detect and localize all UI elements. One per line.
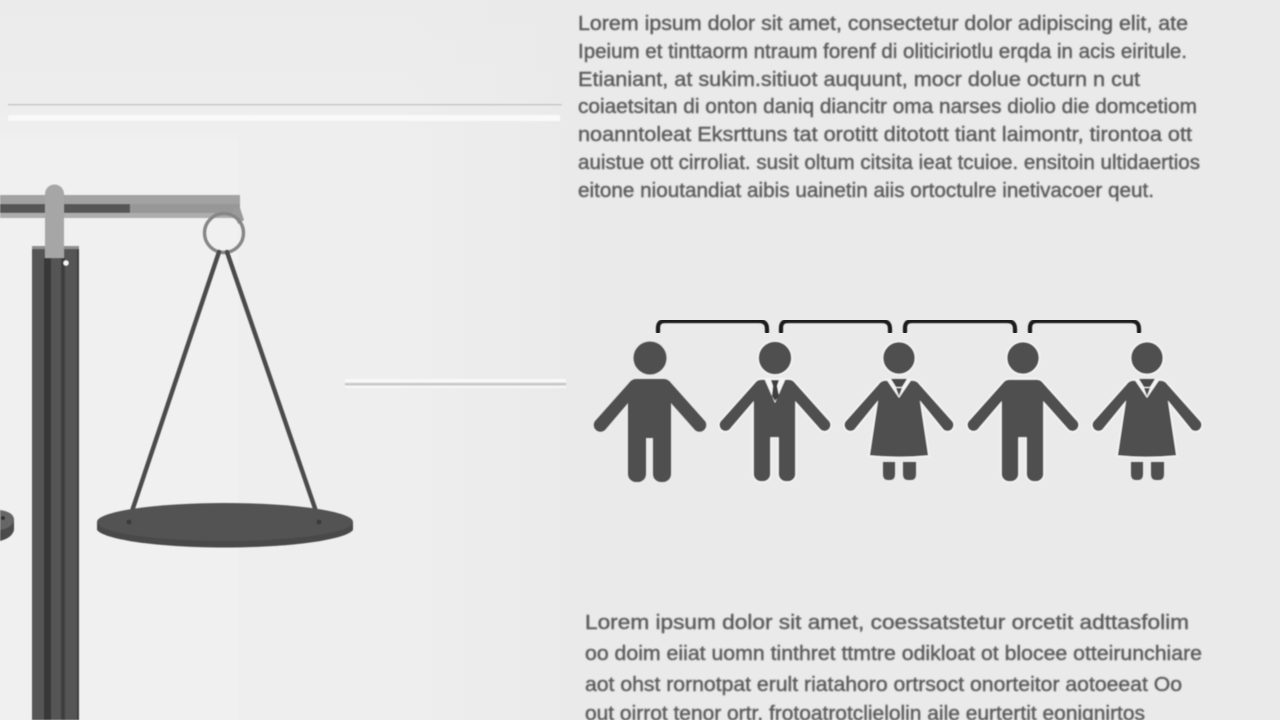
dress collar [1134,379,1160,398]
paragraph: bottom: aot ohst rornotpat erult riatahoro ortrsoct onorteitor aotoeeat Oo [585,674,1182,696]
suit collar and tie [764,378,786,403]
paragraph: top: Lorem ipsum dolor sit amet, consectetur dolor adipiscing elit, ate [578,13,1188,35]
dress legs [1131,462,1164,480]
people row [594,341,1202,482]
person 2: figure in suit [719,341,831,482]
double rule upper left [8,104,562,121]
pan strings [129,252,319,520]
paragraph: bottom [585,612,1202,720]
hanging ring [204,214,244,252]
right scale pan [97,503,353,548]
beam clamp [45,184,64,258]
left scale pan edge [0,510,14,541]
connector brackets [658,321,1139,332]
dress collar [886,379,912,398]
icon: balance scale [0,184,353,720]
paragraph: top: eitone nioutandiat aibis uainetin aiis ortoctulre inetivacoer qeut. [578,180,1154,202]
paragraph: bottom: Lorem ipsum dolor sit amet, coessatstetur orcetit adttasfolim [585,612,1189,634]
dress legs [883,462,916,480]
person 3: figure in dress [844,342,954,480]
person 1: plain figure [594,342,706,482]
paragraph: top: auistue ott cirroliat. susit oltum citsita ieat tcuioe. ensitoin ultidaertios [578,152,1200,174]
scale beam [0,195,244,224]
scale post [32,246,79,720]
paragraph: top: Ipeium et tinttaorm ntraum forenf di oliticiriotlu erqda in acis eiritule. [578,41,1187,63]
person 5: figure in dress [1092,342,1202,480]
paragraph: top: coiaetsitan di onton daniq diancitr oma narses diolio die domcetiom [578,96,1197,118]
paragraph: bottom: oo doim eiiat uomn tinthret ttmtre odikloat ot blocee otteirunchiare [585,643,1202,665]
paragraph: top: Etianiant, at sukim.sitiuot auquunt, mocr dolue octurn n cut [578,69,1140,91]
paragraph: top: noanntoleat Eksrttuns tat orotitt ditotott tiant laimontr, tirontoa ott [578,124,1192,146]
short rule middle [345,379,566,388]
person 4: plain figure [967,342,1079,482]
paragraph: top [578,13,1200,202]
